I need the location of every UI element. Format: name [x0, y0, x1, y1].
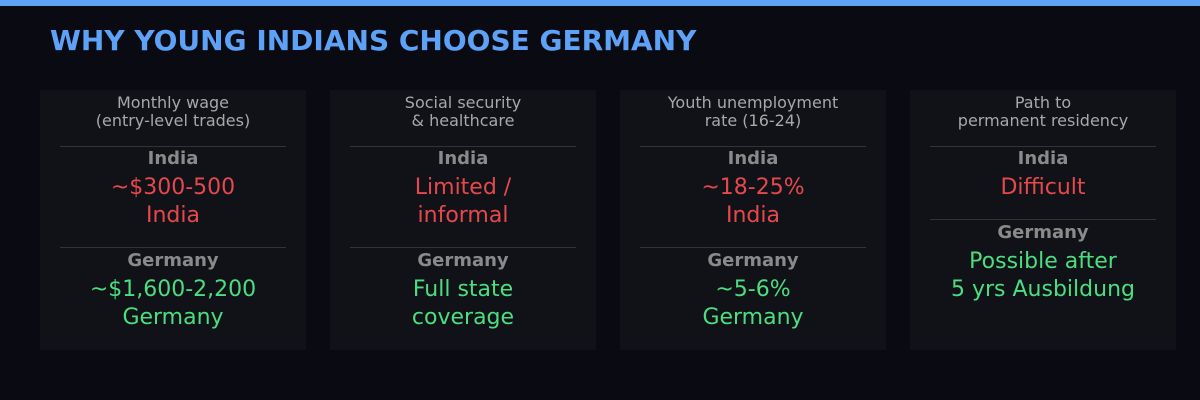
panel: monthly wage: ~$1,600-2,200: [90, 277, 256, 302]
panel: youth unemployment: Germany: [702, 305, 804, 330]
panel: youth unemployment: rate (16-24): [705, 111, 801, 130]
panel: permanent residency: 5 yrs Ausbildung: [951, 277, 1135, 302]
panel: permanent residency: Germany: [997, 222, 1089, 243]
panel: permanent residency: Path to: [1015, 93, 1071, 112]
panel: permanent residency: Possible after: [969, 249, 1118, 274]
panel: social security: Social security: [405, 93, 521, 112]
panel: youth unemployment: India: [728, 148, 778, 169]
panel: youth unemployment: ~18-25%: [701, 175, 805, 200]
panel: social security: Limited /: [415, 175, 512, 200]
panel: youth unemployment: Youth unemployment: [667, 93, 838, 112]
panel: monthly wage: Germany: [122, 305, 224, 330]
panel: monthly wage: (entry-level trades): [96, 111, 250, 130]
panel: social security: & healthcare: [412, 111, 514, 130]
panel: youth unemployment: ~5-6%: [715, 277, 791, 302]
title: WHY YOUNG INDIANS CHOOSE GERMANY: [50, 24, 697, 57]
panel: permanent residency: [910, 90, 1176, 350]
top accent bar: [0, 0, 1200, 6]
panel: social security: informal: [418, 203, 508, 228]
panel: monthly wage: India: [148, 148, 198, 169]
panel: youth unemployment: [620, 90, 886, 350]
panel: youth unemployment: Germany: [707, 250, 799, 271]
panel: youth unemployment: India: [726, 203, 780, 228]
panel: social security: [330, 90, 596, 350]
panel: social security: India: [438, 148, 488, 169]
panel: permanent residency: Difficult: [1000, 175, 1086, 200]
panel: monthly wage: [40, 90, 306, 350]
panel: monthly wage: ~$300-500: [111, 175, 235, 200]
panel: permanent residency: permanent residency: [958, 111, 1128, 130]
panel: social security: Full state: [413, 277, 513, 302]
panel: social security: Germany: [417, 250, 509, 271]
panel: monthly wage: Germany: [127, 250, 219, 271]
panel: permanent residency: India: [1018, 148, 1068, 169]
panel: social security: coverage: [412, 305, 514, 330]
panel: monthly wage: India: [146, 203, 200, 228]
panel: monthly wage: Monthly wage: [117, 93, 229, 112]
